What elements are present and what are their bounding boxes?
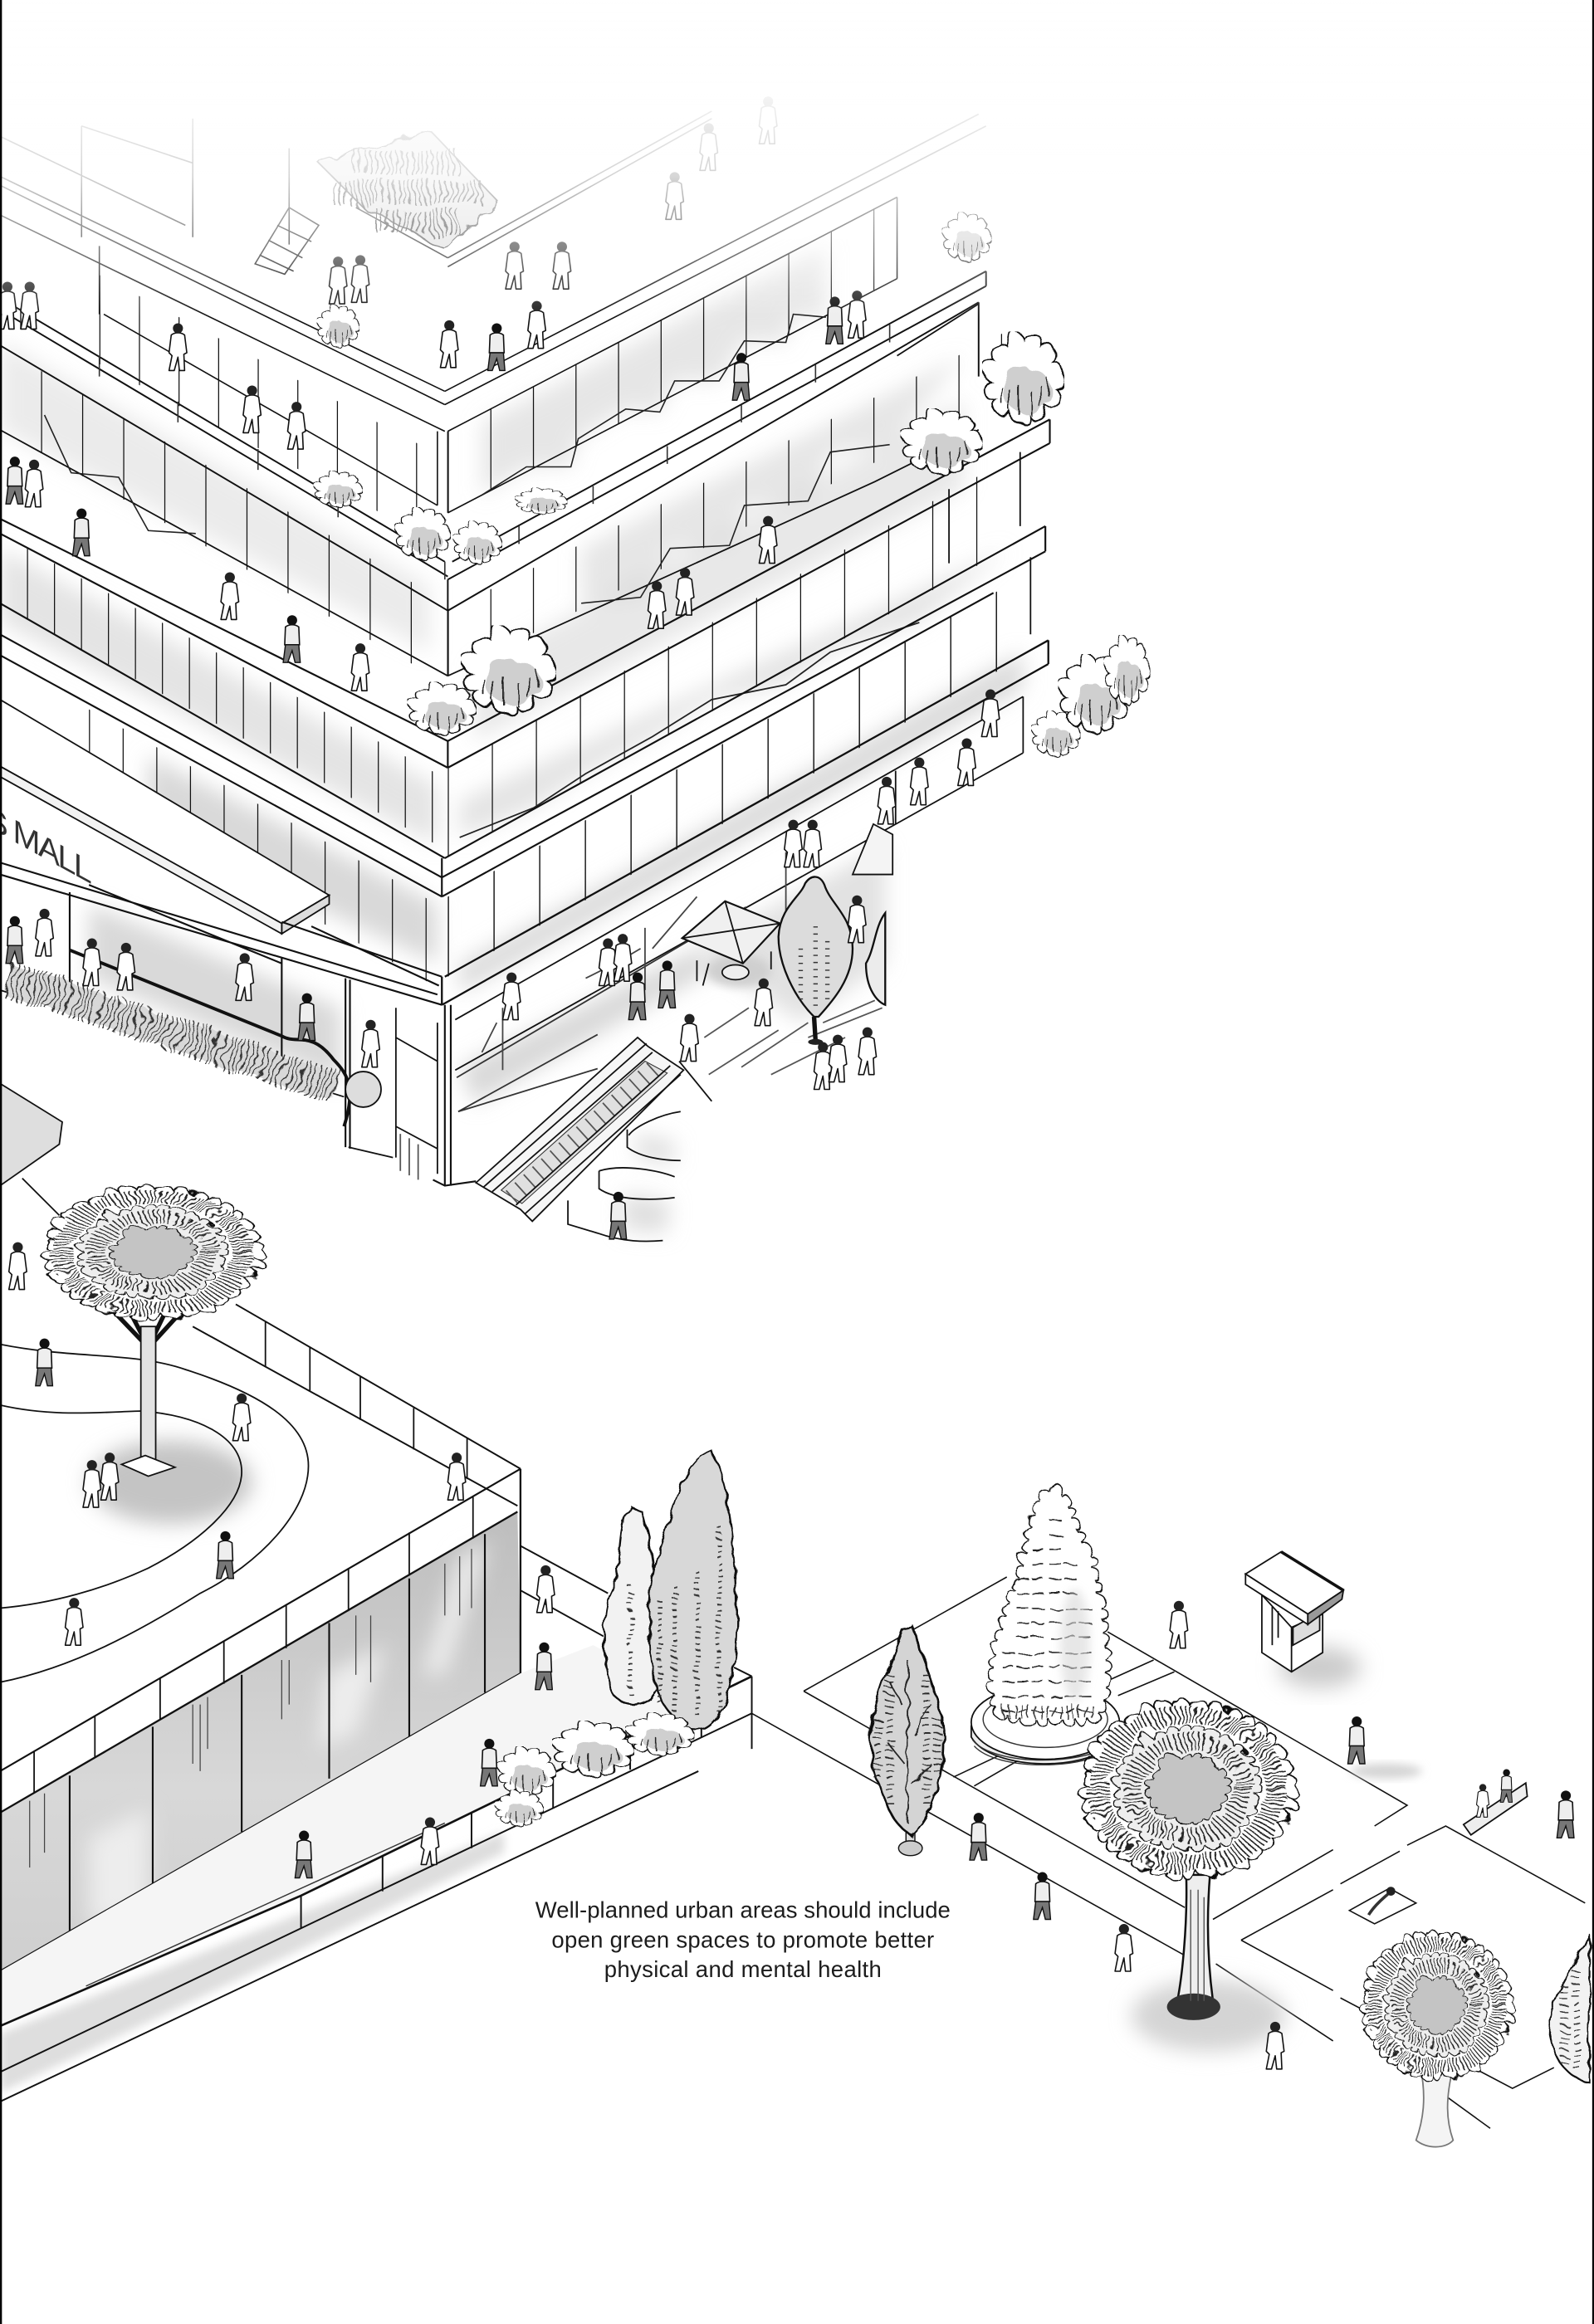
globe and planter in window [345, 1072, 381, 1107]
folded glass panels level one [482, 315, 826, 495]
small plaza tree [1367, 1936, 1507, 2147]
terrace three slab [0, 419, 1050, 768]
ramp bushes [500, 1718, 687, 1823]
escalator [476, 1038, 683, 1221]
platform tree [51, 1190, 254, 1477]
runners and plaza figures [970, 1601, 1574, 2069]
right-going rooftop lines [445, 115, 986, 513]
platform railing back [193, 1304, 521, 1506]
building: roof level [0, 111, 1026, 676]
twin cypress trees [604, 1451, 737, 1731]
fountain [971, 1490, 1119, 1765]
caption: Well-planned urban areas should include [535, 1897, 951, 1923]
terrace three wall and glass [0, 304, 979, 676]
office mullions, roof level, right face [447, 237, 897, 472]
sidewalk hatching [704, 1000, 883, 1075]
planted bed behind glass [7, 979, 338, 1089]
awning with mall sign [0, 700, 330, 934]
caption: open green spaces to promote better [551, 1926, 934, 1952]
tree shadow plaza [1132, 1980, 1286, 2051]
slab four [0, 526, 1045, 896]
top fade of upper floors [0, 0, 1594, 319]
ramp floor [0, 1645, 702, 2026]
left-going rooftop lines [0, 136, 445, 505]
street level shopfront right [451, 696, 1023, 1111]
people inside shopfront and street [6, 690, 1000, 1239]
caption: physical and mental health [604, 1956, 882, 1982]
platform deck lines [0, 1345, 308, 1682]
tree on street [779, 876, 853, 1045]
mall storefront [0, 862, 476, 1186]
large plaza tree [1088, 1706, 1288, 2020]
slab five [442, 640, 1049, 1005]
tree cut by right edge [1549, 1934, 1590, 2082]
facade four [949, 452, 1020, 564]
terrace two rails and slab [0, 271, 986, 611]
people on platform and ramp [9, 1243, 555, 1877]
platform umbrella [0, 1083, 62, 1215]
people on upper terraces [0, 96, 866, 691]
building: lower floors [0, 419, 1050, 1005]
terrace planting [319, 218, 1145, 752]
cypress tree [870, 1624, 943, 1856]
platform front rail [0, 1469, 521, 1794]
street umbrella [682, 901, 780, 987]
glass wall below platform [0, 1469, 521, 1971]
facade five [1029, 557, 1031, 634]
roof planter and upper box [81, 111, 711, 274]
street tree cut at right [866, 913, 885, 1005]
ramp edge shading [0, 1832, 504, 2092]
tree shadow [89, 1441, 252, 1524]
circular steps [568, 1111, 681, 1242]
plaza paving lines [752, 1577, 1585, 2128]
ramp railing and edges [0, 1545, 752, 2102]
caption [535, 1897, 951, 1982]
building: soft facade shading [0, 245, 1023, 1233]
second umbrella cut at right [853, 824, 892, 875]
office mullions, roof level, left face [100, 320, 438, 499]
corner column [433, 1005, 476, 1186]
kiosk [1245, 1552, 1362, 1688]
